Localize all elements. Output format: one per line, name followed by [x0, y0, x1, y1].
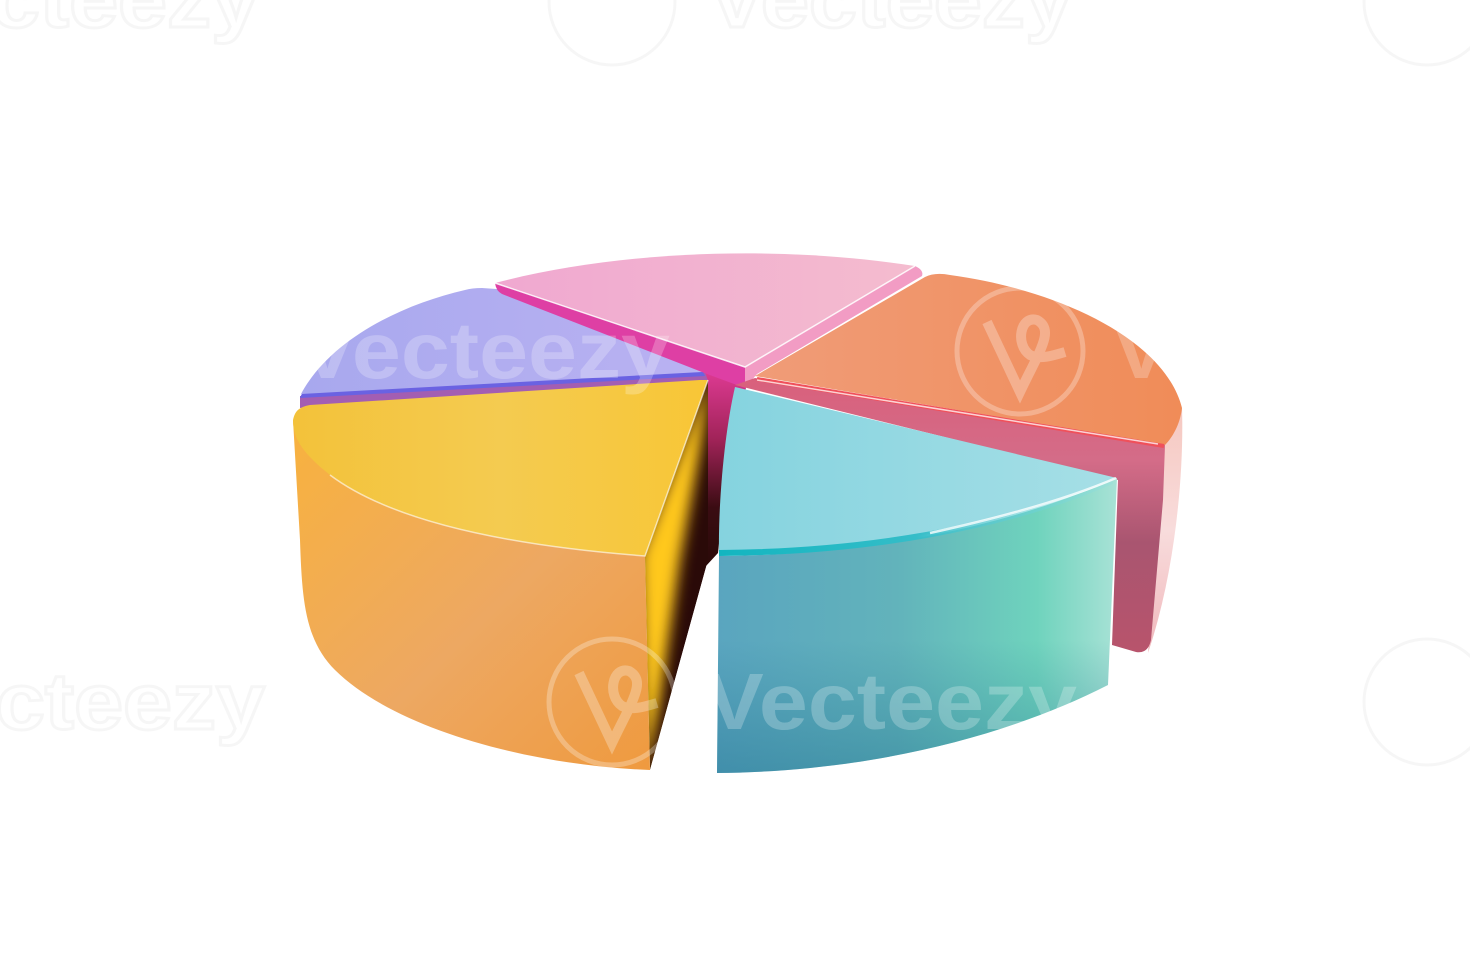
center core	[700, 372, 750, 566]
watermark: right middle: Vecteezy	[1113, 306, 1470, 395]
yellow top	[293, 380, 708, 556]
infographic canvas	[0, 0, 1470, 773]
watermarks	[142, 288, 1470, 765]
watermark: bottom center	[549, 639, 1078, 765]
teal rim	[719, 481, 1112, 553]
slice: teal	[717, 387, 1117, 773]
coral cut face	[735, 378, 1165, 652]
watermark: bottom center: Vecteezy	[705, 657, 1078, 746]
pink right side	[745, 266, 922, 388]
watermark: left middle	[142, 288, 671, 414]
coral rim	[757, 379, 1164, 446]
watermark: left middle: Vecteezy	[298, 306, 671, 395]
watermark: bottom row	[0, 639, 1470, 765]
slice: purple	[300, 288, 712, 408]
yellow outer side	[293, 420, 650, 770]
coral top	[755, 274, 1182, 445]
pink top	[495, 253, 915, 367]
teal top	[719, 387, 1117, 556]
pink left side	[495, 283, 745, 388]
slice: yellow	[293, 370, 712, 780]
coral outer side	[1148, 408, 1182, 653]
watermark: right middle	[957, 288, 1470, 414]
yellow cut face	[645, 380, 708, 770]
slice: pink	[495, 253, 922, 388]
watermark: top row	[0, 0, 1470, 65]
slice: coral	[735, 274, 1182, 653]
yellow rim highlight	[330, 380, 708, 556]
pie chart: 3D exploded pie	[293, 253, 1182, 780]
teal outer side	[717, 478, 1117, 773]
faint watermarks on white margins	[0, 0, 1470, 765]
